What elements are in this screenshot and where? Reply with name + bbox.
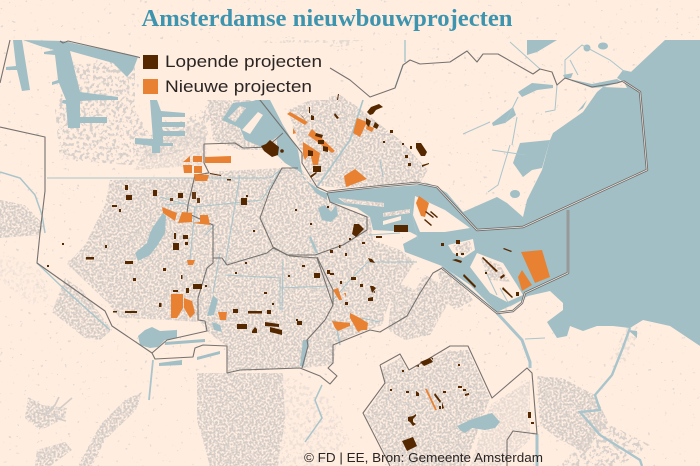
inner lake north xyxy=(513,140,550,177)
Gaasperplas xyxy=(457,413,500,433)
swatch: nieuwe projecten xyxy=(143,79,158,94)
Nieuwe Meer xyxy=(138,327,177,348)
swatch: lopende projecten xyxy=(143,55,158,69)
Sloterplas xyxy=(135,213,166,261)
dike boundaries xyxy=(328,81,647,313)
legend xyxy=(140,43,329,100)
new projects (orange) xyxy=(162,112,550,410)
source credit: © FD | EE, Bron: Gemeente Amsterdam xyxy=(304,451,543,465)
label: nieuwe projecten: Nieuwe projecten xyxy=(165,77,312,96)
harbour A xyxy=(6,40,30,91)
IJmeer and IJ xyxy=(327,40,700,346)
harbour C xyxy=(135,100,185,153)
current projects (brown) xyxy=(47,94,534,451)
harbour B xyxy=(23,40,138,128)
north lakes xyxy=(518,83,553,97)
built-up on islands xyxy=(228,106,510,282)
label: lopende projecten: Lopende projecten xyxy=(165,52,322,71)
title: Amsterdamse nieuwbouwprojecten xyxy=(142,6,512,32)
central pools xyxy=(318,205,338,222)
harbour D and main channel xyxy=(222,100,327,200)
land: IJburg islands and Zeeburg xyxy=(228,106,523,302)
